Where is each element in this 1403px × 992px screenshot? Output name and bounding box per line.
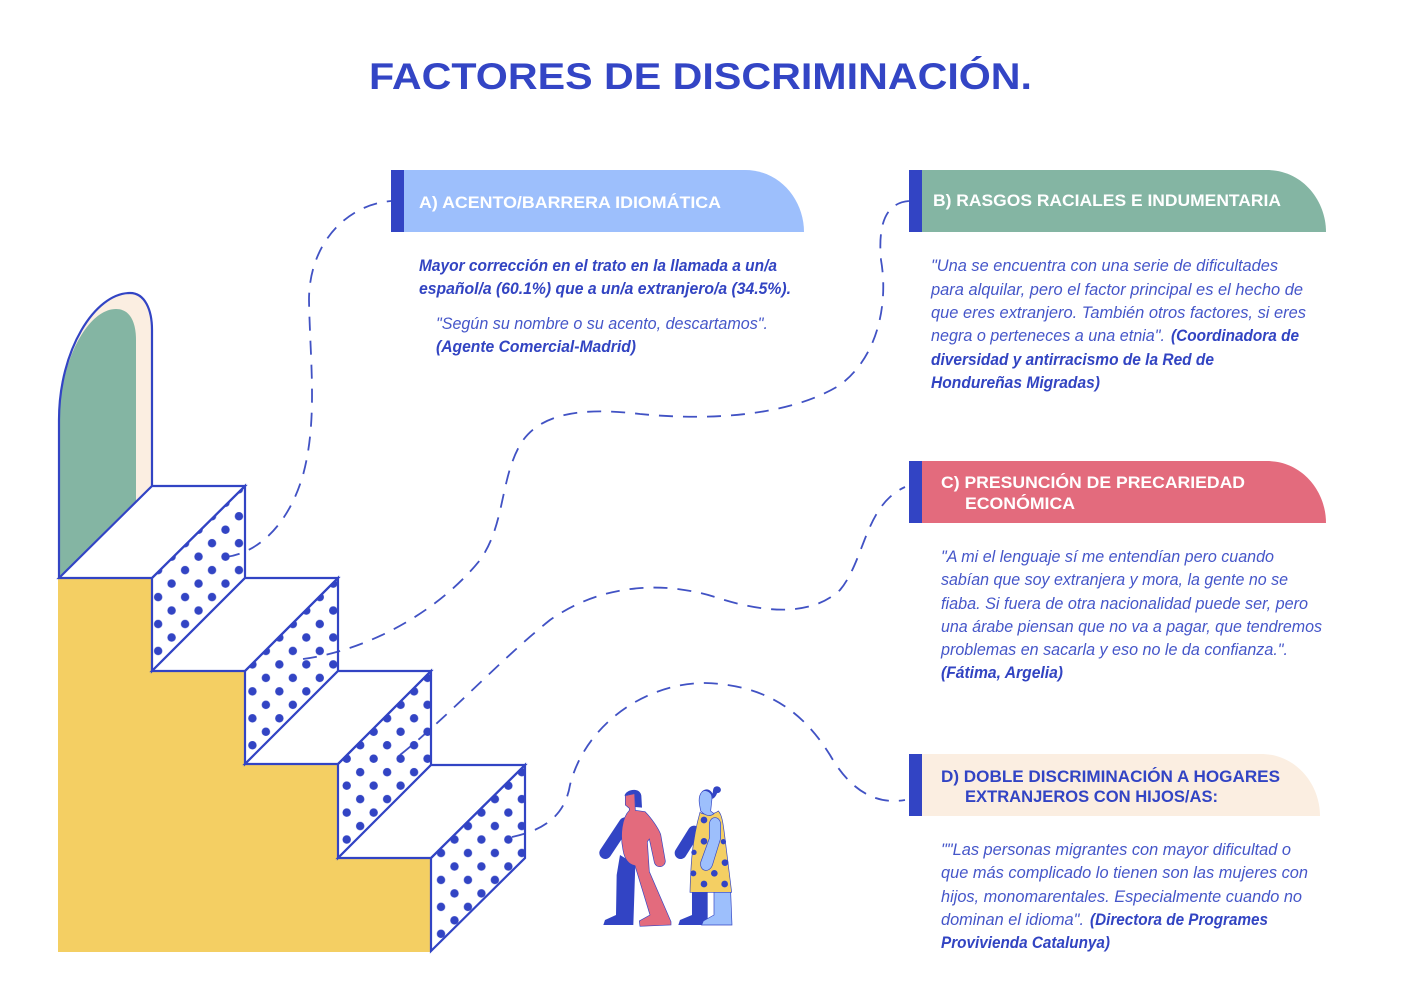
panel D quote: (Directora de Programes (1090, 911, 1268, 929)
panel B quote: "Una se encuentra con una serie de dificultades (931, 257, 1278, 275)
panel B quote: que eres extranjero. También otros factores, si eres (931, 304, 1306, 322)
woman figure (678, 786, 732, 925)
panel A quote: "Según su nombre o su acento, descartamos". (436, 315, 768, 333)
panel C quote: (Fátima, Argelia) (941, 664, 1063, 682)
panel C header (909, 461, 1326, 523)
panel A statistic (419, 257, 791, 298)
panel A quote (436, 315, 768, 356)
panel A statistic: Mayor corrección en el trato en la llamada a un/a (419, 257, 777, 275)
panel C quote: una árabe piensan que no va a pagar, que tendremos (941, 618, 1322, 636)
panel C quote: sabían que soy extranjera y mora, la gente no se (941, 571, 1288, 589)
panel A header: A) ACENTO/BARRERA IDIOMÁTICA (419, 193, 721, 212)
panel B quote: diversidad y antirracismo de la Red de (931, 351, 1214, 369)
step 2 (152, 578, 338, 764)
panel C quote (940, 548, 1322, 682)
panel D: double discrimination for foreign households with children (909, 754, 1320, 952)
panel D quote: ""Las personas migrantes con mayor dificultad o (941, 841, 1291, 859)
panel C header: ECONÓMICA (965, 494, 1075, 513)
connector: step 4 to panel D (512, 683, 905, 837)
panel A: accent and language barrier (391, 170, 804, 356)
panel D quote: hijos, monomarentales. Especialmente cuando no (941, 888, 1302, 906)
panel D quote (941, 841, 1308, 952)
panel D header (909, 754, 1320, 816)
yellow stair body (58, 578, 431, 952)
panel A header (391, 170, 804, 232)
arch doorway (59, 293, 152, 578)
panel A quote: (Agente Comercial-Madrid) (436, 338, 636, 356)
panel B quote: negra o perteneces a una etnia". (931, 327, 1165, 345)
panel B quote: Hondureñas Migradas) (931, 374, 1100, 392)
panel D quote: que más complicado lo tienen son las mujeres con (941, 864, 1308, 882)
illustration: staircase with arch (58, 293, 525, 952)
panel B quote: para alquilar, pero el factor principal es el hecho de (930, 281, 1303, 299)
panel B: racial features and clothing (909, 170, 1326, 392)
connector: step 2 to panel B (303, 201, 909, 659)
panel D header: EXTRANJEROS CON HIJOS/AS: (965, 787, 1218, 806)
connector: step 3 to panel C (400, 487, 905, 755)
illustration: two people walking (603, 786, 732, 926)
panel B quote (930, 257, 1306, 392)
panel C quote: "A mi el lenguaje sí me entendían pero cuando (941, 548, 1274, 566)
step 1 (59, 486, 245, 671)
panel D quote: Provivienda Catalunya) (941, 934, 1110, 952)
title: FACTORES DE DISCRIMINACIÓN. (369, 55, 1032, 97)
panel D quote: dominan el idioma". (941, 911, 1084, 929)
step 3 (245, 671, 431, 858)
panel B header: B) RASGOS RACIALES E INDUMENTARIA (933, 191, 1281, 210)
man figure (603, 790, 671, 926)
panel C quote: fiaba. Si fuera de otra nacionalidad puede ser, pero (941, 595, 1308, 613)
panel B quote: (Coordinadora de (1171, 327, 1299, 345)
panel B header (909, 170, 1326, 232)
panel C header: C) PRESUNCIÓN DE PRECARIEDAD (941, 473, 1245, 492)
panel C quote: problemas en sacarla y eso no le da confianza.". (940, 641, 1288, 659)
panel A statistic: español/a (60.1%) que a un/a extranjero/a (34.5%). (419, 280, 791, 298)
connector: step 1 to panel A (226, 201, 391, 557)
panel D header: D) DOBLE DISCRIMINACIÓN A HOGARES (941, 767, 1280, 786)
step 4 (338, 765, 525, 951)
panel C: presumed economic precarity (909, 461, 1326, 682)
